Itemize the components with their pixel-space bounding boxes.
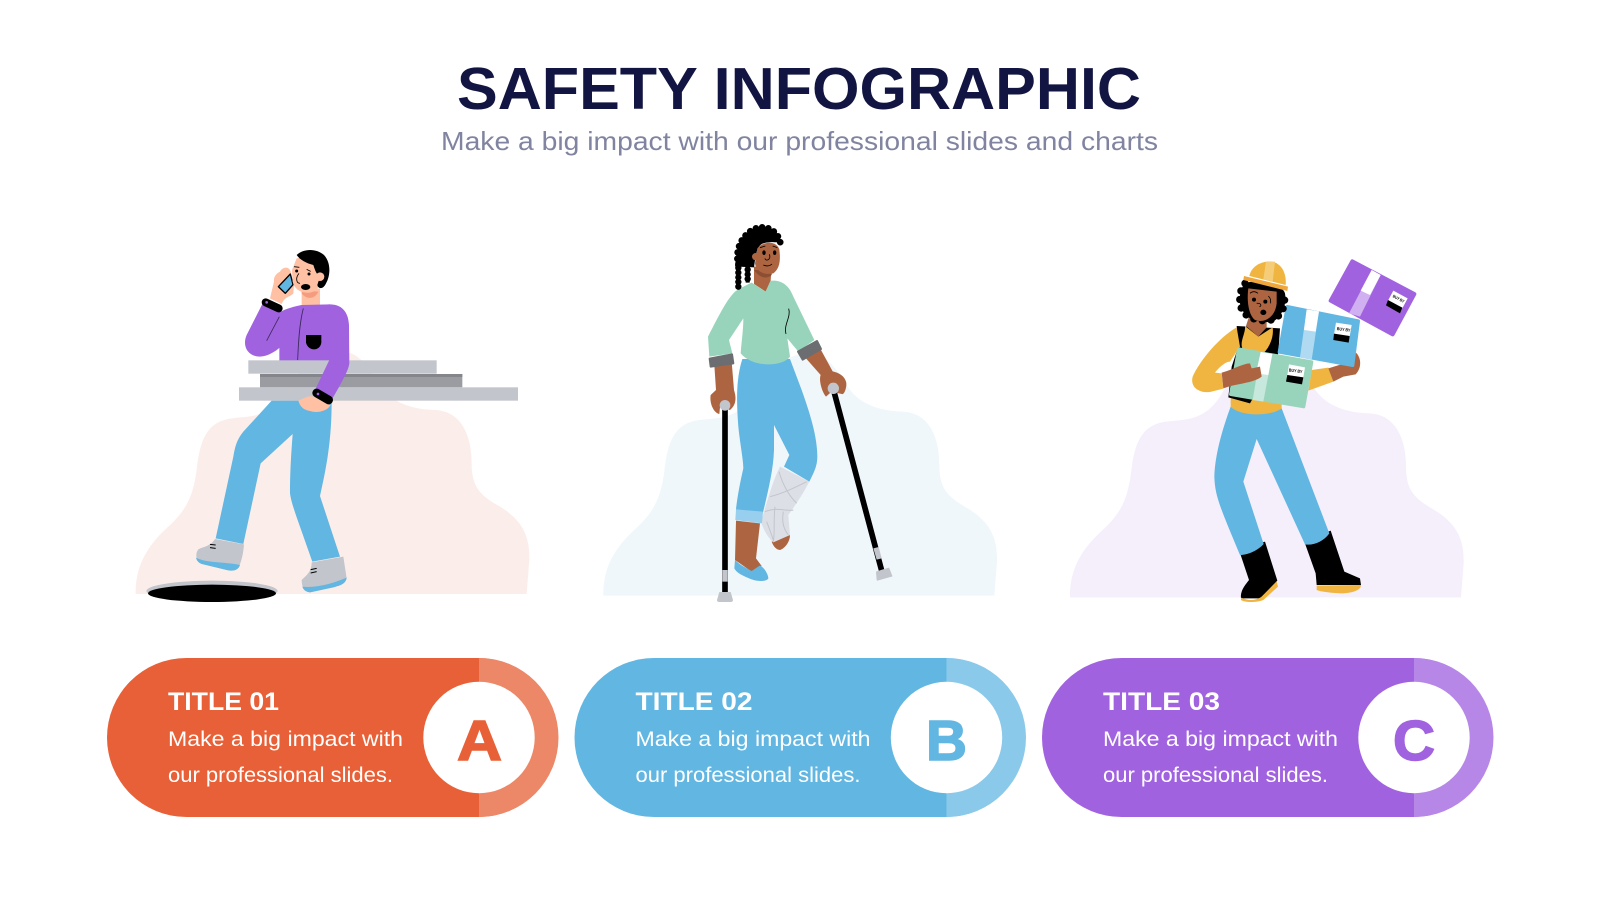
left crutch — [717, 400, 733, 602]
letter badge B — [891, 682, 1002, 793]
pill background — [1042, 658, 1493, 817]
body text: Make a big impact with — [636, 728, 870, 751]
left hand — [1222, 363, 1262, 388]
letter badge B: B — [926, 709, 967, 773]
background blob: peach — [136, 352, 529, 594]
heading: TITLE 03 — [1103, 688, 1220, 716]
right shoe — [302, 557, 347, 592]
panel: title 02 — [574, 658, 1026, 817]
head — [737, 227, 782, 274]
trousers — [1214, 407, 1329, 555]
neck — [1246, 317, 1267, 337]
shirt details — [267, 308, 321, 360]
pocket hand — [298, 396, 331, 412]
waist — [1231, 397, 1282, 414]
background blob: lavender — [1070, 355, 1464, 597]
heading: TITLE 02 — [636, 688, 752, 716]
sweater crease — [785, 309, 789, 334]
purple box: BUY BY — [1392, 293, 1406, 304]
body text: our professional slides. — [636, 764, 860, 787]
background blob: light blue — [603, 353, 997, 596]
letter badge C: C — [1393, 709, 1435, 773]
letter badge A — [423, 682, 535, 793]
pill light end — [479, 658, 558, 817]
safety vest — [1228, 326, 1280, 403]
torso — [279, 304, 333, 362]
right crutch — [828, 383, 892, 580]
trouser cuff — [735, 509, 763, 523]
right sleeve cuff — [798, 341, 821, 360]
panel: title 03 — [1042, 658, 1494, 817]
leg cast — [761, 467, 809, 550]
right cuff — [317, 393, 329, 400]
right boot — [1304, 531, 1361, 593]
man trousers — [216, 401, 340, 562]
left arm — [245, 303, 302, 357]
blue box: BUY BY — [1337, 326, 1351, 333]
pill light end — [1414, 658, 1494, 817]
left sleeve cuff — [710, 354, 733, 367]
hair braids — [738, 263, 748, 288]
body text — [1103, 728, 1338, 787]
right arm — [1308, 368, 1333, 391]
shirt collar — [1242, 326, 1273, 353]
pill background — [107, 658, 558, 817]
illustration: worker in hard hat carrying boxes — [1070, 261, 1464, 602]
illustration: man on phone near open manhole — [136, 250, 529, 602]
steel planks — [239, 360, 518, 401]
head — [292, 250, 329, 293]
head — [1240, 282, 1285, 322]
body text: Make a big impact with — [168, 728, 403, 751]
open manhole — [146, 581, 278, 602]
blue box — [1279, 307, 1358, 365]
left arm — [1192, 327, 1240, 392]
letter badge A: A — [457, 709, 502, 773]
right arm and hand — [806, 349, 846, 397]
subtitle: Make a big impact with our professional slides and charts — [441, 126, 1158, 156]
left arm and hand — [710, 362, 735, 414]
neck — [302, 288, 320, 308]
neck — [754, 267, 772, 292]
green box — [1231, 349, 1312, 407]
body text — [636, 728, 870, 787]
hand with phone — [270, 268, 294, 304]
title: SAFETY INFOGRAPHIC — [457, 56, 1141, 122]
left boot — [1239, 542, 1278, 602]
panel: title 01 — [107, 658, 558, 817]
heading: TITLE 01 — [168, 688, 279, 716]
body text: our professional slides. — [1103, 764, 1328, 787]
left shoe — [196, 539, 244, 571]
green box: BUY BY — [1289, 367, 1303, 374]
body text: Make a big impact with — [1103, 728, 1338, 751]
purple box — [1331, 261, 1414, 334]
right hand — [1328, 353, 1360, 382]
body text — [168, 728, 403, 787]
letter badge C — [1358, 682, 1470, 793]
trousers — [736, 359, 817, 514]
pill background — [574, 658, 1026, 817]
left cuff — [265, 301, 279, 308]
foot and shoe — [734, 521, 768, 581]
pill light end — [946, 658, 1026, 817]
illustration: woman with leg cast on crutches — [603, 227, 997, 602]
body text: our professional slides. — [168, 764, 393, 787]
right arm — [315, 304, 349, 400]
hard hat — [1243, 262, 1288, 291]
sweater — [708, 281, 814, 364]
